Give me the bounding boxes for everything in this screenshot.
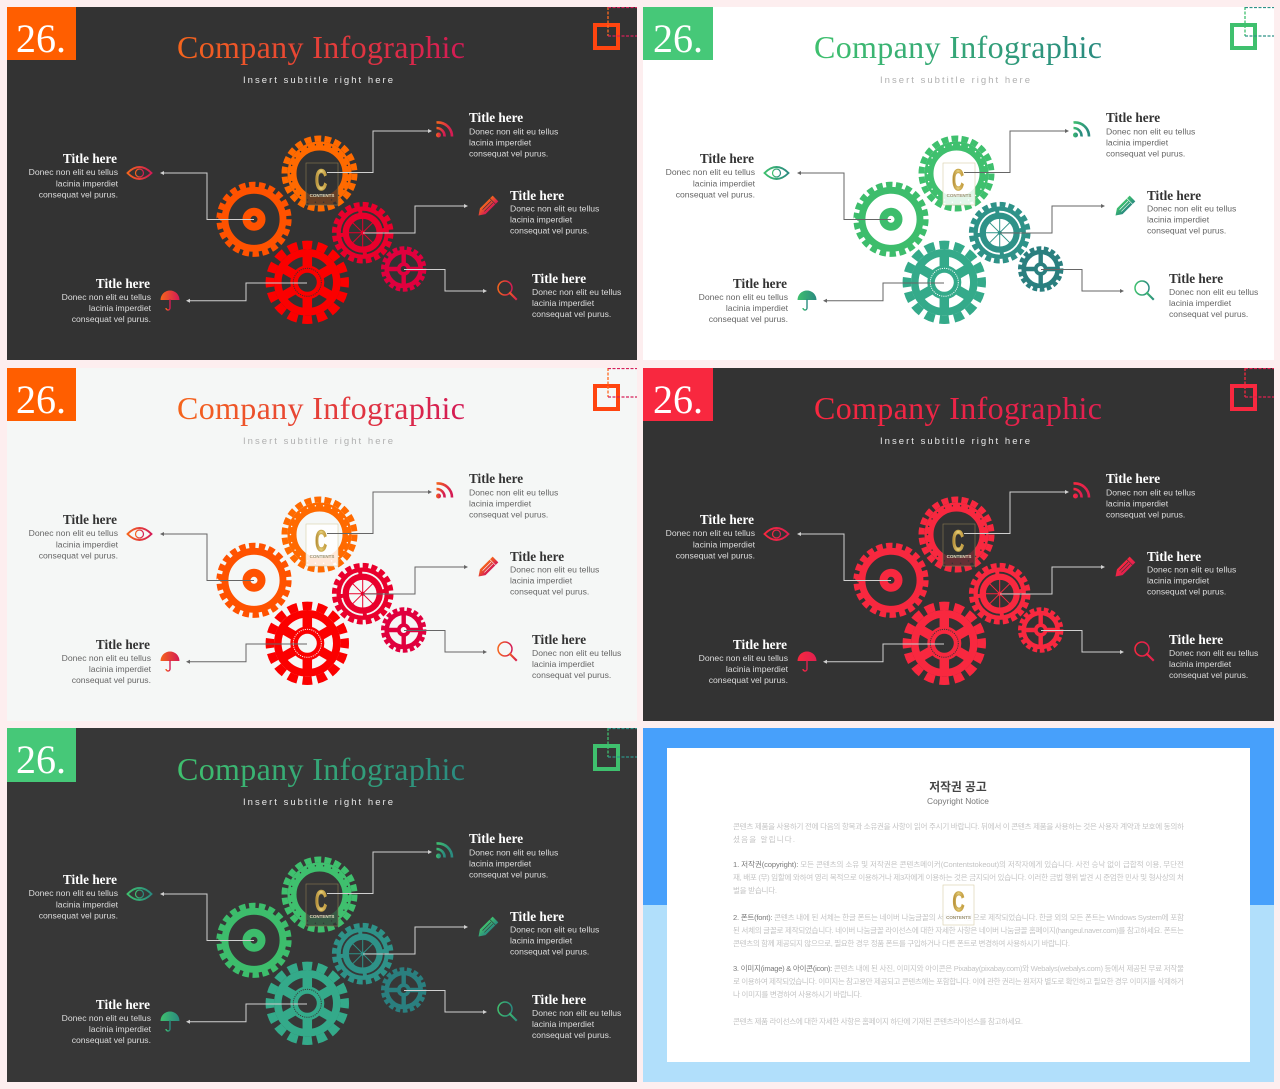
text block: top right: Title here [469,831,523,846]
number badge: 26. [16,737,66,782]
gear 1 [284,500,354,570]
notice section 1 [733,859,1184,895]
text block: top right [1106,471,1195,520]
title: Company Infographic [814,390,1102,426]
connectors [160,850,487,1024]
gear 3 [265,601,349,685]
text block: magnifier: lacinia imperdiet [532,659,595,669]
icon: magnifier [498,281,518,300]
text block: umbrella: Donec non elit eu tellus [699,292,788,302]
text block: magnifier: consequat vel purus. [532,1030,611,1040]
icon: umbrella [798,290,816,310]
number badge [643,368,713,422]
text block: umbrella: Title here [96,637,150,652]
text block: umbrella: lacinia imperdiet [89,664,152,674]
icon: pencil [1113,196,1135,218]
text block: eye: consequat vel purus. [676,190,755,200]
text block: umbrella: consequat vel purus. [709,314,788,324]
notice section 2: 콘텐츠의 함께 제공되지 않으므로, 필요한 경우 정품 폰트를 구입하거나 다른 폰트로 변경하여 사용하시기 바랍니다. [733,938,1070,948]
logo: C [952,164,964,197]
gear 2 [856,546,926,615]
text block: top right: lacinia imperdiet [469,138,532,148]
gear 2 [856,184,926,254]
icon: magnifier [1135,642,1154,662]
text block: umbrella: Title here [733,276,787,291]
text block: top right: consequat vel purus. [1106,510,1185,520]
text block: magnifier: Donec non elit eu tellus [532,648,621,658]
text block: umbrella: consequat vel purus. [72,1035,151,1045]
text block: eye: Donec non elit eu tellus [666,167,755,177]
text block: eye: consequat vel purus. [39,550,118,560]
notice section 3 [733,963,1184,999]
gear 5 [1020,609,1062,651]
text block: magnifier [532,632,621,680]
text block: top right [469,831,558,880]
gear 1 [922,500,992,570]
gear 5 [1020,248,1062,290]
subtitle: Insert subtitle right here [880,436,1030,447]
text block: magnifier: lacinia imperdiet [532,1019,595,1029]
text block: pencil [1147,188,1236,236]
text block: pencil: Donec non elit eu tellus [510,564,599,574]
text block: eye: Title here [63,151,117,166]
subtitle: Insert subtitle right here [880,75,1030,86]
logo: CONTENTS [310,193,334,198]
text block: pencil [510,549,599,596]
text block: top right: Title here [469,471,523,486]
text block: magnifier: Title here [532,992,586,1007]
logo: C [315,525,327,558]
corner square ornament [595,368,637,409]
gear 4 [971,565,1028,622]
text block: pencil [1147,549,1236,596]
text block: magnifier [1169,632,1258,680]
text block: top right: consequat vel purus. [469,510,548,520]
notice section 3: 로 이용하여 제작되었습니다. 이미지는 참고용만 제공되고 콘텐츠에는 포함합니다. 이에 관한 권리는 원저자 별도로 확인하고 필요한 경우 이미지를 삭제하거 [733,976,1184,986]
notice intro [733,821,1184,844]
text block: magnifier: consequat vel purus. [1169,670,1248,680]
text block: umbrella: Title here [96,997,150,1012]
text block: magnifier: lacinia imperdiet [532,298,595,308]
text block: top right: lacinia imperdiet [469,498,532,508]
connectors [160,129,487,303]
notice section 1: 벌을 받습니다. [733,885,777,895]
icon: umbrella [160,1012,180,1031]
gear 4 [971,204,1028,261]
text block: eye: consequat vel purus. [39,910,118,920]
gear 1 [284,860,354,930]
icon: pencil [476,557,498,579]
number badge [643,7,713,61]
logo: CONTENTS [946,915,971,920]
text block: magnifier: consequat vel purus. [1169,309,1248,319]
text block: magnifier: Title here [532,632,586,647]
text block: magnifier [532,992,621,1040]
text block: eye: Donec non elit eu tellus [29,528,118,538]
icon: rss [436,483,452,498]
text block: umbrella: consequat vel purus. [72,675,151,685]
text block: eye: consequat vel purus. [39,190,118,200]
text block: magnifier [532,271,621,319]
text block: eye: lacinia imperdiet [56,178,119,188]
gear 4 [334,204,391,261]
notice section 3: 3. 이미지(image) & 아이콘(icon): 콘텐츠 내에 된 사진, 이미지와 아이콘은 Pixabay(pixabay.com)와 Webalys(webalys.com) 등에서 제공된 무료 저작물 [733,963,1184,973]
number badge [7,7,76,61]
icon: umbrella [798,652,816,671]
text block: magnifier: Title here [1169,632,1223,647]
text block: umbrella [62,276,152,324]
icon: eye [764,167,788,179]
number badge [7,728,76,782]
text block: pencil: lacinia imperdiet [1147,214,1210,224]
text block: umbrella [62,637,152,685]
icon: eye [128,888,152,900]
notice section 2: 2. 폰트(font): 콘텐츠 내에 된 서체는 한글 폰트는 네이버 나눔글꼴의 서체를 기본으로 제작되었습니다. 한글 외의 모든 폰트는 Windows System에 포함 [733,912,1184,922]
notice heading: 저작권 공고 [929,780,987,794]
notice section 1: 1. 저작권(copyright): 모든 콘텐츠의 소유 및 저작권은 콘텐츠메이커(Contentstokeout)의 저작자에게 있습니다. 사전 승낙 없이 급합적 이용, 무단전 [733,859,1184,869]
icon: rss [1073,122,1089,138]
corner square ornament [1232,368,1274,409]
notice section 1: 재, 배포 (무) 임할에 와하여 영리 목적으로 이용하거나 제3자에게 이용하는 것은 금지되어 있습니다. 이러한 금법 행위 발견 시 준엄한 민사 및 형사상의 처 [733,872,1184,882]
text block: pencil: lacinia imperdiet [510,936,573,946]
text block: eye [29,872,119,920]
text block: pencil: lacinia imperdiet [510,214,573,224]
notice section 3: 나 이미지를 변경하여 사용하시기 바랍니다. [733,989,862,999]
gear 2 [219,546,289,615]
text block: eye: Title here [700,512,754,527]
icon: magnifier [498,1002,518,1022]
number badge: 26. [653,16,703,61]
icon: umbrella [160,290,180,310]
gear 2 [219,184,289,254]
text block: pencil: Donec non elit eu tellus [1147,204,1236,214]
gear 3 [265,240,349,324]
text block: pencil: Title here [510,549,564,564]
text block: umbrella: Donec non elit eu tellus [62,1013,151,1023]
text block: eye [666,512,756,560]
text block: top right: lacinia imperdiet [469,858,532,868]
text block: top right: Donec non elit eu tellus [1106,488,1195,498]
text block: top right: lacinia imperdiet [1106,138,1169,148]
icon: pencil [1113,557,1135,579]
gear 3 [265,961,349,1045]
icon: magnifier [1135,281,1154,300]
text block: eye: lacinia imperdiet [56,540,119,550]
logo: CONTENTS [310,914,334,919]
gear 2 [219,906,289,975]
text block: eye: consequat vel purus. [676,550,755,560]
text block: pencil: consequat vel purus. [510,226,589,236]
gear 4 [334,925,391,982]
logo [306,163,338,205]
text block: pencil [510,188,599,236]
logo [943,885,974,925]
logo: CONTENTS [310,554,334,559]
connectors [797,129,1124,303]
icon: eye [128,167,152,179]
icon: eye [128,528,152,540]
connectors [160,490,487,664]
text block: pencil: Title here [1147,549,1201,564]
title: Company Infographic [177,751,465,787]
text block: magnifier: consequat vel purus. [532,670,611,680]
panel: dark warm [7,7,637,360]
title: Company Infographic [177,390,465,426]
logo [943,163,975,205]
text block: magnifier: Title here [1169,271,1223,286]
text block: top right: Donec non elit eu tellus [469,126,558,136]
text block: umbrella [699,637,789,685]
text block: top right: Donec non elit eu tellus [469,488,558,498]
text block: top right [469,471,558,520]
notice footer line: 콘텐츠 제품 라이선스에 대한 자세한 사항은 홈페이지 하단에 기재된 콘텐츠라이선스를 참고하세요. [733,1016,1023,1026]
logo: C [315,885,327,918]
text block: top right: Title here [469,110,523,125]
text block: pencil: consequat vel purus. [510,586,589,596]
icon: pencil [476,196,498,218]
text block: magnifier [1169,271,1258,319]
text block: umbrella: consequat vel purus. [72,314,151,324]
logo: CONTENTS [947,554,971,559]
text block: top right: Donec non elit eu tellus [469,848,558,858]
text block: magnifier: Donec non elit eu tellus [532,1008,621,1018]
corner square ornament [595,728,637,769]
number badge: 26. [16,16,66,61]
text block: eye [29,512,119,560]
subtitle: Insert subtitle right here [243,797,393,808]
text block: top right: consequat vel purus. [1106,148,1185,158]
gear 5 [383,248,424,290]
connectors [797,490,1124,664]
number badge: 26. [653,377,703,422]
text block: eye: lacinia imperdiet [693,540,756,550]
text block: top right: lacinia imperdiet [1106,498,1169,508]
logo: CONTENTS [947,193,971,198]
corner square ornament [1232,7,1274,48]
text block: magnifier: lacinia imperdiet [1169,298,1232,308]
notice intro: 셨음을 알립니다. [733,834,795,844]
text block: pencil: Title here [510,909,564,924]
icon: magnifier [498,642,518,662]
text block: magnifier: Donec non elit eu tellus [532,287,621,297]
title: Company Infographic [814,29,1102,65]
text block: umbrella: Donec non elit eu tellus [62,292,151,302]
logo [943,524,975,566]
text block: umbrella: Title here [96,276,150,291]
text block: pencil: Donec non elit eu tellus [510,924,599,934]
text block: top right: Title here [1106,110,1160,125]
text block: umbrella: consequat vel purus. [709,675,788,685]
text block: eye: Title here [63,872,117,887]
subtitle: Insert subtitle right here [243,75,393,86]
text block: pencil: consequat vel purus. [1147,226,1226,236]
icon: umbrella [160,652,180,671]
gear 1 [922,138,992,208]
gear 4 [334,565,391,622]
text block: umbrella: lacinia imperdiet [726,664,789,674]
notice intro: 콘텐츠 제품을 사용하기 전에 다음의 항목과 소유권을 사항이 읽어 주시기 바랍니다. 뒤에서 이 콘텐츠 제품을 사용하는 것은 사용자 계약과 보호에 동의하 [733,821,1184,831]
text block: eye [29,151,119,200]
text block: eye: Donec non elit eu tellus [29,888,118,898]
text block: pencil: lacinia imperdiet [510,576,573,586]
text block: magnifier: Title here [532,271,586,286]
panel: white green [643,7,1274,360]
logo [306,884,338,926]
text block: magnifier: Donec non elit eu tellus [1169,648,1258,658]
text block: top right: consequat vel purus. [469,148,548,158]
text block: pencil: lacinia imperdiet [1147,576,1210,586]
icon: rss [436,843,452,858]
gear 5 [383,969,424,1011]
text block: top right: consequat vel purus. [469,870,548,880]
text block: umbrella: Donec non elit eu tellus [62,653,151,663]
text block: umbrella: lacinia imperdiet [89,1024,152,1034]
text block: eye: Donec non elit eu tellus [29,167,118,177]
icon: pencil [476,917,498,939]
text block: eye [666,151,756,200]
logo: C [315,164,327,197]
text block: umbrella: Title here [733,637,787,652]
text block: pencil [510,909,599,956]
gear 3 [902,240,986,324]
panel: dark green [7,728,637,1082]
text block: pencil: consequat vel purus. [1147,586,1226,596]
notice subheading: Copyright Notice [927,796,989,806]
text block: umbrella: lacinia imperdiet [89,303,152,313]
icon: rss [1073,483,1089,498]
text block: umbrella [699,276,789,324]
text block: pencil: Title here [510,188,564,203]
logo: C [952,525,964,558]
text block: top right: Title here [1106,471,1160,486]
logo [306,524,338,566]
icon: rss [436,122,452,138]
gear 5 [383,609,424,651]
panel: dark red [643,368,1274,721]
gear 3 [902,601,986,685]
panel: copyright notice [643,728,1274,1082]
number badge: 26. [16,377,66,422]
icon: eye [764,528,788,540]
corner square ornament [595,7,637,48]
logo: C [952,886,964,917]
text block: umbrella: lacinia imperdiet [726,303,789,313]
text block: eye: Donec non elit eu tellus [666,528,755,538]
panel: light warm [7,368,637,721]
title: Company Infographic [177,29,465,65]
subtitle: Insert subtitle right here [243,436,393,447]
text block: pencil: Donec non elit eu tellus [1147,564,1236,574]
notice section 2 [733,912,1184,948]
notice section 2: 된 서체의 글꼴로 제작되었습니다. 네이버 나눔글꼴 라이선스에 대한 자세한 사항은 네이버 나눔글꼴 홈페이지(hangeul.naver.com)를 참고하세요. 폰트는 [733,925,1184,935]
text block: magnifier: consequat vel purus. [532,309,611,319]
text block: top right [1106,110,1195,158]
text block: eye: lacinia imperdiet [693,178,756,188]
gear 1 [284,138,354,208]
text block: magnifier: Donec non elit eu tellus [1169,287,1258,297]
text block: magnifier: lacinia imperdiet [1169,659,1232,669]
text block: eye: Title here [63,512,117,527]
text block: umbrella [62,997,152,1045]
text block: eye: Title here [700,151,754,166]
text block: pencil: Donec non elit eu tellus [510,204,599,214]
text block: top right: Donec non elit eu tellus [1106,126,1195,136]
number badge [7,368,76,422]
text block: pencil: consequat vel purus. [510,946,589,956]
text block: umbrella: Donec non elit eu tellus [699,653,788,663]
text block: pencil: Title here [1147,188,1201,203]
text block: top right [469,110,558,158]
text block: eye: lacinia imperdiet [56,900,119,910]
